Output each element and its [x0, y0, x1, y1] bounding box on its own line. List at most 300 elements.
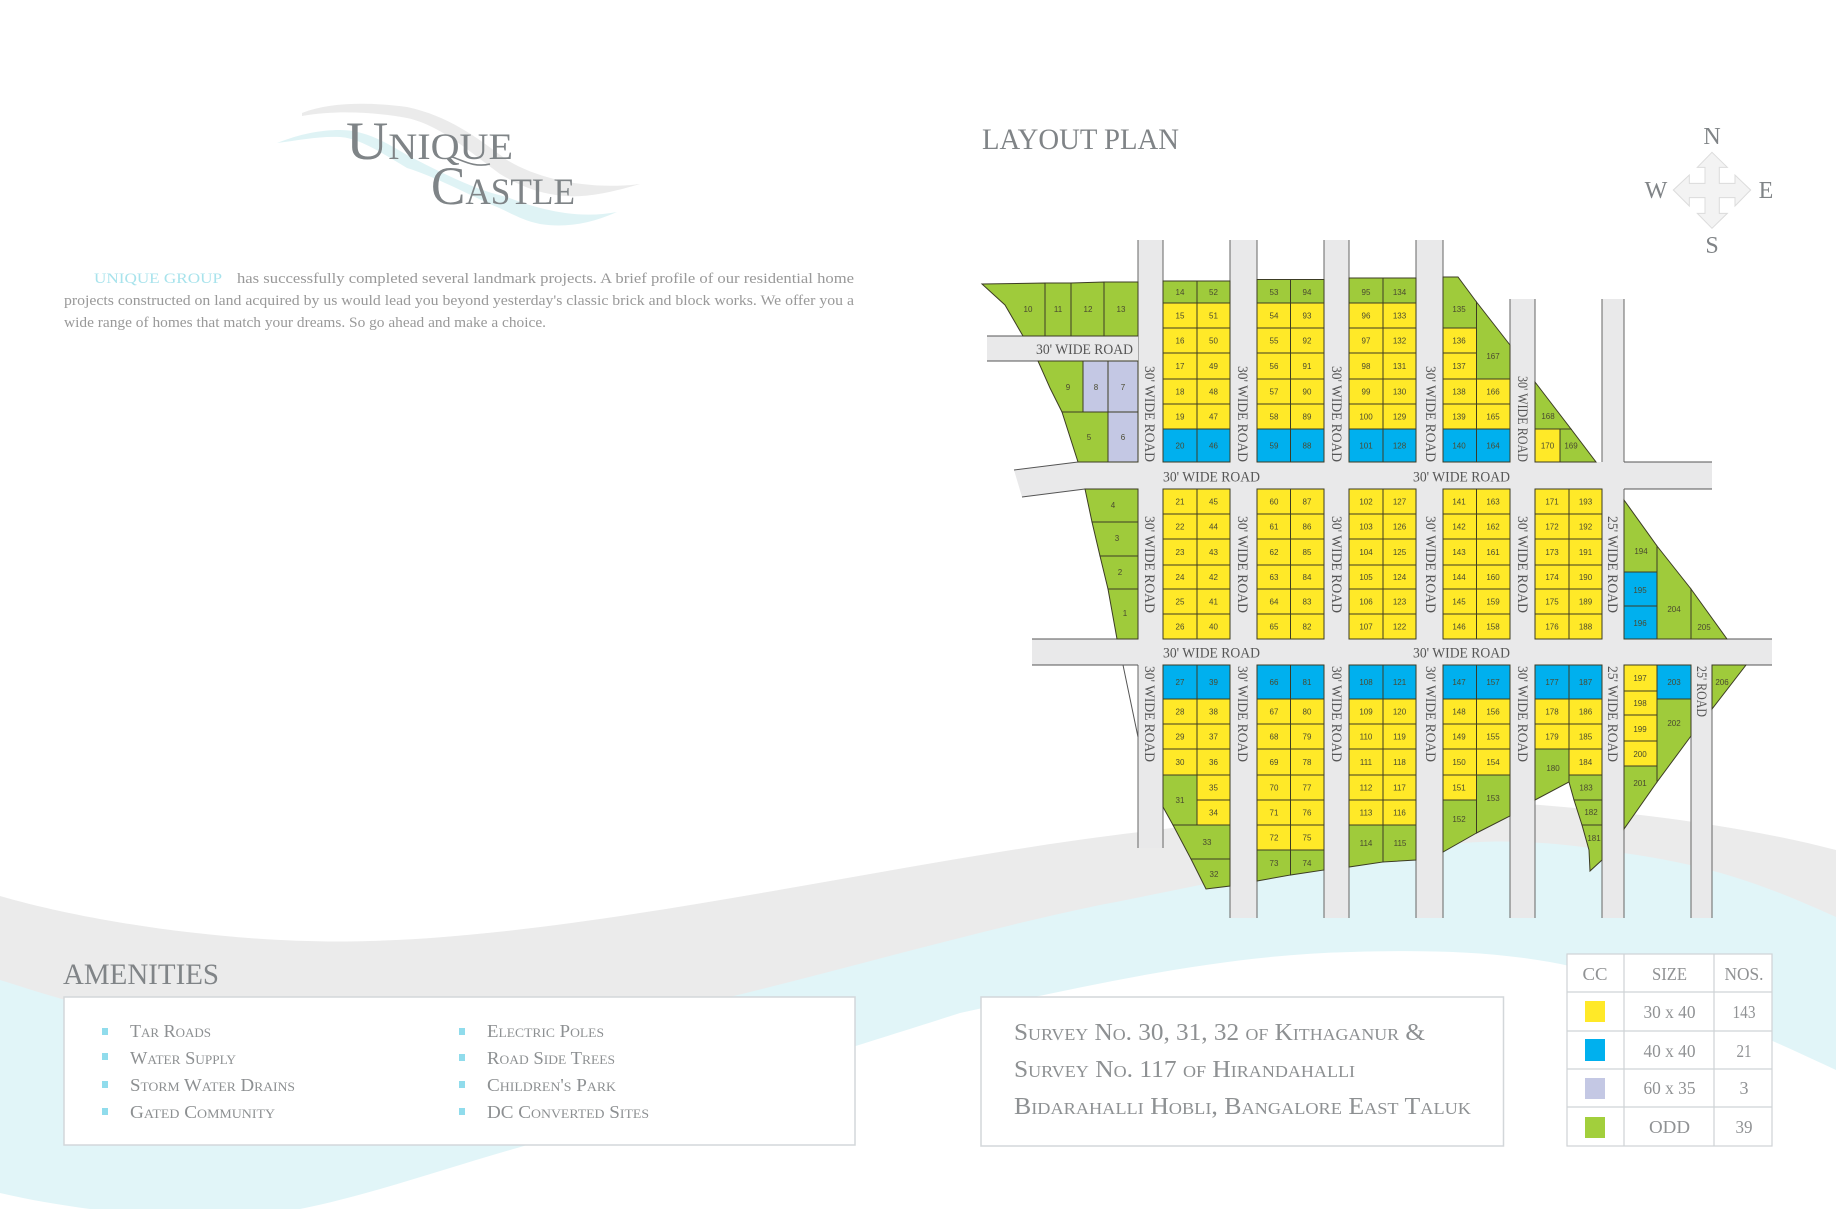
block 2 column 6: plots 194-196, 204, 205: 205 — [1697, 623, 1711, 632]
block 3 column 3: plots 108-121: 115 — [1394, 839, 1407, 848]
block 3 column 1: plots 27-39: 32 — [1210, 870, 1219, 879]
block 1 column 4: plots 135-140, 164-167: 164 — [1486, 442, 1500, 450]
block 3 column 1: plots 27-39: 30 — [1176, 758, 1185, 767]
block 2 column 4: plots 141-146, 158-163: 143 — [1452, 548, 1466, 557]
legend row: odd — [1585, 1117, 1752, 1138]
legend header: CC — [1582, 964, 1608, 984]
amenity list: right column: Road Side Trees — [487, 1048, 615, 1068]
plot 206 — [1712, 665, 1746, 709]
block 3 column 2: plots 66-81: 80 — [1303, 708, 1312, 716]
plots 5-9: 8 — [1094, 383, 1099, 392]
block 2 column 5: plots 171-176, 188-193 — [1535, 489, 1602, 639]
block 3 column 3: plots 108-121 — [1349, 665, 1416, 867]
block 2 column 1: plots 21-26, 40-45: 26 — [1176, 622, 1185, 632]
block 3 column 1: plots 27-39: 39 — [1209, 678, 1218, 687]
plots 5-9 — [1038, 361, 1138, 462]
block 1 column 2: plots 53-59, 88-94: 94 — [1303, 288, 1312, 297]
horizontal road labels: 30' WIDE ROAD — [1413, 646, 1510, 662]
amenity list: right column: Electric Poles — [487, 1021, 604, 1041]
block 1 column 5: plots 168-170: 170 — [1541, 442, 1555, 450]
block 3 column 5: plots 177-187: 182 — [1584, 808, 1598, 817]
survey address text: Bidarahalli Hobli, Bangalore East Taluk — [1014, 1094, 1472, 1120]
compass letters: S — [1705, 233, 1719, 259]
block 1 column 5: plots 168-170 — [1535, 382, 1596, 462]
plots 10-13 — [982, 282, 1138, 336]
block 1 column 3: plots 95-101, 128-134: 101 — [1359, 442, 1373, 450]
block 3 column 2: plots 66-81: 71 — [1270, 808, 1279, 818]
vertical road labels: top row: 30' WIDE ROAD — [1328, 366, 1344, 462]
block 3 column 3: plots 108-121: 110 — [1360, 732, 1373, 742]
vertical road labels: bottom row: 30' WIDE ROAD — [1328, 666, 1344, 762]
block 3 column 1: plots 27-39: 35 — [1209, 784, 1218, 792]
block 3 column 6: plots 197-203: 202 — [1667, 719, 1681, 728]
survey address text — [1014, 1020, 1472, 1120]
legend row: 40 x 40: 21 — [1736, 1041, 1752, 1061]
block 3 column 2: plots 66-81: 81 — [1303, 678, 1312, 687]
plots 10-13: 11 — [1054, 305, 1063, 314]
block 1 column 1: plots 14-20, 46-52: 46 — [1209, 442, 1218, 450]
survey address text: Survey No. 30, 31, 32 of Kithaganur & — [1014, 1020, 1425, 1046]
block 2 column 4: plots 141-146, 158-163 — [1443, 489, 1510, 639]
block 2 column 1: plots 21-26, 40-45: 42 — [1209, 573, 1218, 582]
block 3 column 2: plots 66-81: 69 — [1270, 758, 1279, 767]
block 3 column 4: plots 147-157: 150 — [1452, 758, 1466, 767]
logo swoosh: blue — [277, 130, 617, 226]
horizontal road labels — [1036, 342, 1510, 662]
plots 5-9: 6 — [1121, 433, 1126, 442]
block 1 column 3: plots 95-101, 128-134: 99 — [1362, 388, 1371, 396]
plots 1-4: 2 — [1118, 568, 1123, 577]
block 1 column 4: plots 135-140, 164-167: 165 — [1486, 412, 1500, 422]
block 1 column 1: plots 14-20, 46-52: 52 — [1209, 288, 1218, 297]
block 3 column 1: plots 27-39: 27 — [1176, 678, 1185, 687]
block 1 column 3: plots 95-101, 128-134: 130 — [1393, 388, 1407, 396]
vertical road labels: top row — [1141, 366, 1530, 462]
vertical road labels: bottom row: 30' WIDE ROAD — [1234, 666, 1250, 762]
block 3 column 4: plots 147-157: 148 — [1452, 708, 1466, 716]
block 3 column 5: plots 177-187: 180 — [1546, 764, 1560, 773]
legend row: 30 x 40: 143 — [1732, 1002, 1756, 1022]
block 3 column 6: plots 197-203 — [1624, 665, 1691, 829]
block 2 column 2: plots 60-65, 82-87: 83 — [1303, 598, 1312, 606]
block 3 column 2: plots 66-81 — [1257, 665, 1324, 881]
block 2 column 6: plots 194-196, 204, 205: 194 — [1634, 547, 1648, 556]
block 2 column 2: plots 60-65, 82-87: 82 — [1303, 622, 1312, 632]
block 1 column 2: plots 53-59, 88-94: 57 — [1270, 388, 1279, 396]
block 2 column 4: plots 141-146, 158-163: 161 — [1486, 548, 1500, 557]
block 2 column 6: plots 194-196, 204, 205: 204 — [1667, 605, 1681, 614]
amenity list: right column: DC Converted Sites — [487, 1102, 649, 1122]
block 3 column 2: plots 66-81: 73 — [1270, 859, 1279, 868]
amenity list: left column — [130, 1021, 295, 1122]
block 3 column 1: plots 27-39: 33 — [1203, 838, 1212, 847]
block 3 column 5: plots 177-187: 178 — [1545, 708, 1559, 716]
block 2 column 5: plots 171-176, 188-193: 190 — [1579, 573, 1593, 582]
block 1 column 1: plots 14-20, 46-52 — [1163, 281, 1230, 462]
site plan — [982, 240, 1772, 918]
vertical road labels: middle row: 30' WIDE ROAD — [1234, 516, 1250, 613]
block 2 column 6: plots 194-196, 204, 205: 196 — [1633, 619, 1647, 628]
block 1 column 1: plots 14-20, 46-52: 18 — [1176, 388, 1185, 396]
legend header: NOS. — [1724, 964, 1764, 984]
legend row: 30 x 40 — [1585, 1001, 1756, 1022]
block 3 column 5: plots 177-187: 184 — [1579, 758, 1593, 767]
block 2 column 1: plots 21-26, 40-45: 45 — [1209, 498, 1218, 506]
block 2 column 2: plots 60-65, 82-87: 65 — [1270, 622, 1279, 632]
block 2 column 1: plots 21-26, 40-45: 24 — [1176, 573, 1185, 582]
block 1 column 2: plots 53-59, 88-94: 53 — [1270, 288, 1279, 297]
block 2 column 6: plots 194-196, 204, 205 — [1624, 500, 1727, 639]
block 2 column 5: plots 171-176, 188-193: 174 — [1545, 573, 1559, 582]
intro paragraph: wide range of homes that match your dreams. So go ahead and make a choice. — [64, 315, 546, 331]
block 2 column 3: plots 102-107, 122-127: 125 — [1393, 548, 1407, 557]
compass letters: E — [1759, 178, 1773, 204]
background wave: light gray — [0, 800, 1836, 1036]
block 2 column 4: plots 141-146, 158-163: 158 — [1486, 622, 1500, 632]
block 1 column 2: plots 53-59, 88-94: 93 — [1303, 312, 1312, 320]
block 3 column 4: plots 147-157 — [1443, 665, 1510, 852]
block 3 column 4: plots 147-157: 157 — [1486, 678, 1500, 687]
block 3 column 4: plots 147-157: 149 — [1452, 732, 1466, 742]
horizontal road labels: 30' WIDE ROAD — [1163, 646, 1260, 662]
block 2 column 4: plots 141-146, 158-163: 146 — [1452, 622, 1466, 632]
block 1 column 1: plots 14-20, 46-52: 51 — [1209, 312, 1218, 320]
block 3 column 3: plots 108-121: 116 — [1393, 808, 1406, 818]
block 2 column 5: plots 171-176, 188-193: 176 — [1545, 622, 1559, 632]
intro paragraph: projects constructed on land acquired by us would lead you beyond yesterday's classic brick and block works. We offer you a — [64, 293, 854, 309]
panel: amenities — [64, 997, 855, 1145]
block 1 column 4: plots 135-140, 164-167: 140 — [1452, 442, 1466, 450]
block 2 column 2: plots 60-65, 82-87: 61 — [1270, 522, 1279, 532]
block 3 column 1: plots 27-39: 37 — [1209, 732, 1218, 742]
block 1 column 1: plots 14-20, 46-52: 50 — [1209, 336, 1218, 346]
block 1 column 2: plots 53-59, 88-94: 56 — [1270, 362, 1279, 371]
block 3 column 4: plots 147-157: 156 — [1486, 708, 1500, 716]
block 1 column 3: plots 95-101, 128-134: 100 — [1359, 412, 1373, 422]
block 3 column 2: plots 66-81: 72 — [1270, 834, 1279, 842]
heading: layout plan: LAYOUT PLAN — [982, 123, 1179, 156]
legend row: 40 x 40 — [1585, 1039, 1752, 1061]
block 1 column 2: plots 53-59, 88-94: 90 — [1303, 388, 1312, 396]
block 1 column 3: plots 95-101, 128-134: 132 — [1393, 336, 1407, 346]
block 2 column 5: plots 171-176, 188-193: 172 — [1545, 522, 1559, 532]
block 3 column 6: plots 197-203: 203 — [1667, 678, 1681, 687]
block 1 column 1: plots 14-20, 46-52: 20 — [1176, 442, 1185, 450]
block 2 column 5: plots 171-176, 188-193: 171 — [1545, 498, 1559, 506]
road labels — [1036, 342, 1709, 762]
block 1 column 2: plots 53-59, 88-94: 54 — [1270, 312, 1279, 320]
block 1 column 3: plots 95-101, 128-134: 97 — [1362, 336, 1371, 346]
logo swoosh: gray — [302, 104, 640, 196]
block 3 column 5: plots 177-187: 179 — [1545, 732, 1559, 742]
block 2 column 2: plots 60-65, 82-87: 62 — [1270, 548, 1279, 557]
block 2 column 2: plots 60-65, 82-87 — [1257, 489, 1324, 639]
block 3 column 4: plots 147-157: 155 — [1486, 732, 1500, 742]
block 1 column 1: plots 14-20, 46-52: 19 — [1176, 412, 1185, 422]
block 2 column 1: plots 21-26, 40-45: 22 — [1176, 522, 1185, 532]
block 3 column 3: plots 108-121: 117 — [1393, 784, 1406, 792]
block 2 column 4: plots 141-146, 158-163: 141 — [1452, 498, 1466, 506]
logo Q tail — [452, 157, 490, 165]
block 1 column 3: plots 95-101, 128-134: 128 — [1393, 442, 1407, 450]
compass letters — [1645, 124, 1773, 259]
block 3 column 1: plots 27-39: 36 — [1209, 758, 1218, 767]
block 1 column 2: plots 53-59, 88-94: 92 — [1303, 336, 1312, 346]
vertical road labels: middle row: 30' WIDE ROAD — [1141, 516, 1157, 613]
block 2 column 5: plots 171-176, 188-193: 175 — [1545, 598, 1559, 606]
block 3 column 5: plots 177-187: 181 — [1587, 834, 1601, 843]
vertical road labels: middle row: 30' WIDE ROAD — [1514, 516, 1530, 613]
block 2 column 5: plots 171-176, 188-193: 189 — [1579, 598, 1593, 606]
block 2 column 6: plots 194-196, 204, 205: 195 — [1633, 586, 1647, 595]
block 1 column 1: plots 14-20, 46-52: 14 — [1176, 288, 1185, 297]
block 1 column 3: plots 95-101, 128-134: 96 — [1362, 312, 1371, 320]
block 3 column 4: plots 147-157: 147 — [1452, 678, 1466, 687]
block 2 column 1: plots 21-26, 40-45: 41 — [1209, 598, 1218, 606]
vertical road labels: bottom row — [1141, 666, 1709, 762]
block 3 column 3: plots 108-121: 119 — [1393, 732, 1406, 742]
block 1 column 1: plots 14-20, 46-52: 15 — [1176, 312, 1185, 320]
block 3 column 3: plots 108-121: 113 — [1360, 808, 1373, 818]
block 3 column 6: plots 197-203: 197 — [1633, 674, 1647, 683]
horizontal road labels: 30' WIDE ROAD — [1163, 470, 1260, 486]
vertical road labels: top row: 30' WIDE ROAD — [1234, 366, 1250, 462]
legend row: 60 x 35: 60 x 35 — [1644, 1078, 1696, 1098]
block 2 column 2: plots 60-65, 82-87: 85 — [1303, 548, 1312, 557]
block 2 column 2: plots 60-65, 82-87: 87 — [1303, 498, 1312, 506]
block 1 column 2: plots 53-59, 88-94 — [1257, 280, 1324, 462]
compass arrow — [1673, 152, 1751, 228]
block 1 column 3: plots 95-101, 128-134: 133 — [1393, 312, 1407, 320]
block 2 column 4: plots 141-146, 158-163: 142 — [1452, 522, 1466, 532]
vertical road labels: top row: 30' WIDE ROAD — [1141, 366, 1157, 462]
block 2 column 4: plots 141-146, 158-163: 159 — [1486, 598, 1500, 606]
logo word: Castle: CASTLE — [431, 156, 575, 216]
block 2 column 1: plots 21-26, 40-45: 40 — [1209, 622, 1218, 632]
block 3 column 2: plots 66-81: 79 — [1303, 732, 1312, 742]
vertical road labels: middle row: 30' WIDE ROAD — [1422, 516, 1438, 613]
block 3 column 3: plots 108-121: 111 — [1360, 758, 1373, 767]
block 3 column 3: plots 108-121: 108 — [1359, 678, 1373, 687]
block 3 column 5: plots 177-187: 185 — [1579, 732, 1593, 742]
block 1 column 3: plots 95-101, 128-134: 129 — [1393, 412, 1407, 422]
block 1 column 4: plots 135-140, 164-167: 135 — [1452, 305, 1466, 314]
block 1 column 4: plots 135-140, 164-167: 167 — [1486, 352, 1500, 361]
block 1 column 1: plots 14-20, 46-52: 17 — [1176, 362, 1185, 371]
block 2 column 3: plots 102-107, 122-127: 126 — [1393, 522, 1407, 532]
block 3 column 3: plots 108-121: 109 — [1359, 708, 1373, 716]
plots 5-9: 9 — [1066, 383, 1071, 392]
horizontal roads — [987, 336, 1772, 665]
vertical road labels: bottom row: 25' WIDE ROAD — [1604, 666, 1620, 762]
legend row: 60 x 35: 3 — [1740, 1078, 1748, 1098]
block 3 column 3: plots 108-121: 120 — [1393, 708, 1407, 716]
block 2 column 2: plots 60-65, 82-87: 60 — [1270, 498, 1279, 506]
block 3 column 5: plots 177-187 — [1535, 665, 1602, 871]
block 2 column 3: plots 102-107, 122-127: 105 — [1359, 573, 1373, 582]
legend row: odd: ODD — [1649, 1117, 1690, 1137]
plots 10-13: 13 — [1117, 305, 1126, 314]
block 3 column 1: plots 27-39 — [1163, 665, 1230, 889]
vertical road labels: top row: 30' WIDE ROAD — [1422, 366, 1438, 462]
block 1 column 2: plots 53-59, 88-94: 58 — [1270, 412, 1279, 422]
vertical road labels: middle row — [1141, 516, 1620, 613]
block 3 column 3: plots 108-121: 114 — [1360, 839, 1373, 848]
panel: survey details — [981, 997, 1504, 1146]
block 3 column 3: plots 108-121: 118 — [1393, 758, 1406, 767]
legend row: 60 x 35 — [1585, 1078, 1748, 1099]
compass letters: N — [1703, 124, 1721, 150]
block 2 column 2: plots 60-65, 82-87: 64 — [1270, 598, 1279, 606]
block 2 column 3: plots 102-107, 122-127: 123 — [1393, 598, 1407, 606]
amenity list: left column: Gated Community — [130, 1102, 276, 1122]
block 1 column 1: plots 14-20, 46-52: 47 — [1209, 412, 1218, 422]
block 2 column 2: plots 60-65, 82-87: 86 — [1303, 522, 1312, 532]
block 3 column 5: plots 177-187: 183 — [1579, 784, 1593, 792]
block 2 column 2: plots 60-65, 82-87: 84 — [1303, 573, 1312, 582]
block 1 column 1: plots 14-20, 46-52: 16 — [1176, 336, 1185, 346]
project logo: Unique Castle — [277, 104, 640, 226]
roads — [1138, 240, 1712, 918]
block 3 column 2: plots 66-81: 70 — [1270, 784, 1279, 792]
block 3 column 6: plots 197-203: 198 — [1633, 699, 1647, 708]
block 3 column 3: plots 108-121: 112 — [1360, 784, 1373, 792]
survey address text: Survey No. 117 of Hirandahalli — [1014, 1057, 1355, 1083]
block 3 column 5: plots 177-187: 187 — [1579, 678, 1593, 687]
block 3 column 4: plots 147-157: 151 — [1452, 784, 1466, 792]
block 2 column 3: plots 102-107, 122-127: 107 — [1359, 622, 1373, 632]
block 2 column 1: plots 21-26, 40-45 — [1163, 489, 1230, 639]
amenity list: right column: Children's Park — [487, 1075, 617, 1095]
block 1 column 2: plots 53-59, 88-94: 55 — [1270, 336, 1279, 346]
block 1 column 2: plots 53-59, 88-94: 91 — [1303, 362, 1312, 371]
block 3 column 4: plots 147-157: 154 — [1486, 758, 1500, 767]
block 3 column 6: plots 197-203: 200 — [1633, 750, 1647, 759]
vertical road labels: bottom row: 30' WIDE ROAD — [1141, 666, 1157, 762]
block 2 column 5: plots 171-176, 188-193: 191 — [1579, 548, 1593, 557]
intro paragraph — [64, 271, 854, 331]
block 3 column 2: plots 66-81: 75 — [1303, 834, 1312, 842]
plots 10-13: 12 — [1084, 305, 1093, 314]
legend row: 40 x 40: 40 x 40 — [1644, 1041, 1696, 1061]
vertical road labels: top row: 30' WIDE ROAD — [1514, 376, 1530, 462]
block 1 column 4: plots 135-140, 164-167: 139 — [1452, 412, 1466, 422]
block 1 column 1: plots 14-20, 46-52: 49 — [1209, 362, 1218, 371]
block 2 column 5: plots 171-176, 188-193: 192 — [1579, 522, 1593, 532]
vertical road labels: bottom row: 30' WIDE ROAD — [1422, 666, 1438, 762]
plots 1-4 — [1085, 489, 1138, 639]
plots 5-9: 7 — [1121, 383, 1126, 392]
plots 10-13: 10 — [1024, 305, 1033, 314]
vertical road labels: middle row: 30' WIDE ROAD — [1328, 516, 1344, 613]
amenity list: left column: Storm Water Drains — [130, 1075, 295, 1095]
block 2 column 1: plots 21-26, 40-45: 21 — [1176, 498, 1185, 506]
legend header: SIZE — [1652, 964, 1687, 984]
block 1 column 4: plots 135-140, 164-167: 136 — [1452, 336, 1466, 346]
vertical road labels: middle row: 25' WIDE ROAD — [1604, 516, 1620, 613]
block 2 column 1: plots 21-26, 40-45: 43 — [1209, 548, 1218, 557]
block 2 column 3: plots 102-107, 122-127: 102 — [1359, 498, 1373, 506]
road edge lines: horizontal — [987, 336, 1772, 737]
legend row: 30 x 40: 30 x 40 — [1644, 1002, 1696, 1022]
block 3 column 1: plots 27-39: 38 — [1209, 708, 1218, 716]
plots 1-4: 1 — [1123, 609, 1128, 618]
block 1 column 2: plots 53-59, 88-94: 59 — [1270, 442, 1279, 450]
block 2 column 3: plots 102-107, 122-127: 122 — [1393, 622, 1407, 632]
block 3 column 2: plots 66-81: 74 — [1303, 859, 1312, 868]
block 2 column 5: plots 171-176, 188-193: 188 — [1579, 622, 1593, 632]
amenity list: left column: Water Supply — [130, 1048, 237, 1068]
block 2 column 4: plots 141-146, 158-163: 163 — [1486, 498, 1500, 506]
block 2 column 3: plots 102-107, 122-127 — [1349, 489, 1416, 639]
block 2 column 3: plots 102-107, 122-127: 104 — [1359, 548, 1373, 557]
block 2 column 3: plots 102-107, 122-127: 103 — [1359, 522, 1373, 532]
vertical road labels: bottom row: 25' ROAD — [1693, 666, 1709, 717]
block 2 column 1: plots 21-26, 40-45: 25 — [1176, 598, 1185, 606]
block 1 column 4: plots 135-140, 164-167 — [1443, 277, 1510, 462]
legend row: odd: 39 — [1736, 1117, 1752, 1137]
block 3 column 2: plots 66-81: 76 — [1303, 808, 1312, 818]
block 2 column 5: plots 171-176, 188-193: 173 — [1545, 548, 1559, 557]
intro paragraph: has successfully completed several landmark projects. A brief profile of our residential home — [237, 271, 854, 287]
block 1 column 4: plots 135-140, 164-167: 137 — [1452, 362, 1466, 371]
block 3 column 2: plots 66-81: 78 — [1303, 758, 1312, 767]
amenity list: left column: Tar Roads — [130, 1021, 211, 1041]
heading: amenities: AMENITIES — [63, 958, 219, 991]
block 1 column 1: plots 14-20, 46-52: 48 — [1209, 388, 1218, 396]
legend header — [1582, 964, 1764, 984]
block 3 column 6: plots 197-203: 201 — [1633, 779, 1647, 788]
background wave: light blue — [0, 815, 1836, 1209]
block 1 column 3: plots 95-101, 128-134: 98 — [1362, 362, 1371, 371]
block 3 column 2: plots 66-81: 68 — [1270, 732, 1279, 742]
block 1 column 5: plots 168-170: 169 — [1564, 442, 1578, 450]
block 3 column 3: plots 108-121: 121 — [1393, 678, 1407, 687]
amenity list: right column — [487, 1021, 649, 1122]
block 2 column 3: plots 102-107, 122-127: 106 — [1359, 598, 1373, 606]
block 1 column 4: plots 135-140, 164-167: 138 — [1452, 388, 1466, 396]
block 2 column 4: plots 141-146, 158-163: 144 — [1452, 573, 1466, 582]
block 2 column 4: plots 141-146, 158-163: 162 — [1486, 522, 1500, 532]
block 3 column 6: plots 197-203: 199 — [1633, 725, 1647, 734]
block 2 column 3: plots 102-107, 122-127: 127 — [1393, 498, 1407, 506]
block 3 column 1: plots 27-39: 31 — [1176, 796, 1185, 805]
block 2 column 1: plots 21-26, 40-45: 23 — [1176, 548, 1185, 557]
block 1 column 2: plots 53-59, 88-94: 89 — [1303, 412, 1312, 422]
block 3 column 4: plots 147-157: 153 — [1486, 794, 1500, 803]
block 1 column 5: plots 168-170: 168 — [1541, 412, 1555, 421]
plots 1-4: 3 — [1115, 534, 1120, 543]
block 2 column 4: plots 141-146, 158-163: 145 — [1452, 598, 1466, 606]
block 3 column 4: plots 147-157: 152 — [1452, 815, 1466, 824]
vertical road labels: bottom row: 30' WIDE ROAD — [1514, 666, 1530, 762]
block 1 column 2: plots 53-59, 88-94: 88 — [1303, 442, 1312, 450]
block 1 column 4: plots 135-140, 164-167: 166 — [1486, 388, 1500, 396]
block 3 column 1: plots 27-39: 34 — [1209, 808, 1218, 818]
logo word: Unique: UNIQUE — [346, 111, 513, 171]
block 3 column 5: plots 177-187: 186 — [1579, 708, 1593, 716]
block 2 column 4: plots 141-146, 158-163: 160 — [1486, 573, 1500, 582]
block 3 column 5: plots 177-187: 177 — [1545, 678, 1559, 687]
compass letters: W — [1645, 178, 1668, 204]
highlighted company name: UNIQUE GROUP — [94, 271, 222, 287]
block 2 column 3: plots 102-107, 122-127: 124 — [1393, 573, 1407, 582]
legend table — [1567, 954, 1772, 1146]
horizontal road labels: 30' WIDE ROAD — [1036, 342, 1133, 358]
block 3 column 1: plots 27-39: 29 — [1176, 732, 1185, 742]
block 1 column 3: plots 95-101, 128-134 — [1349, 278, 1416, 462]
plots 5-9: 5 — [1087, 433, 1092, 442]
